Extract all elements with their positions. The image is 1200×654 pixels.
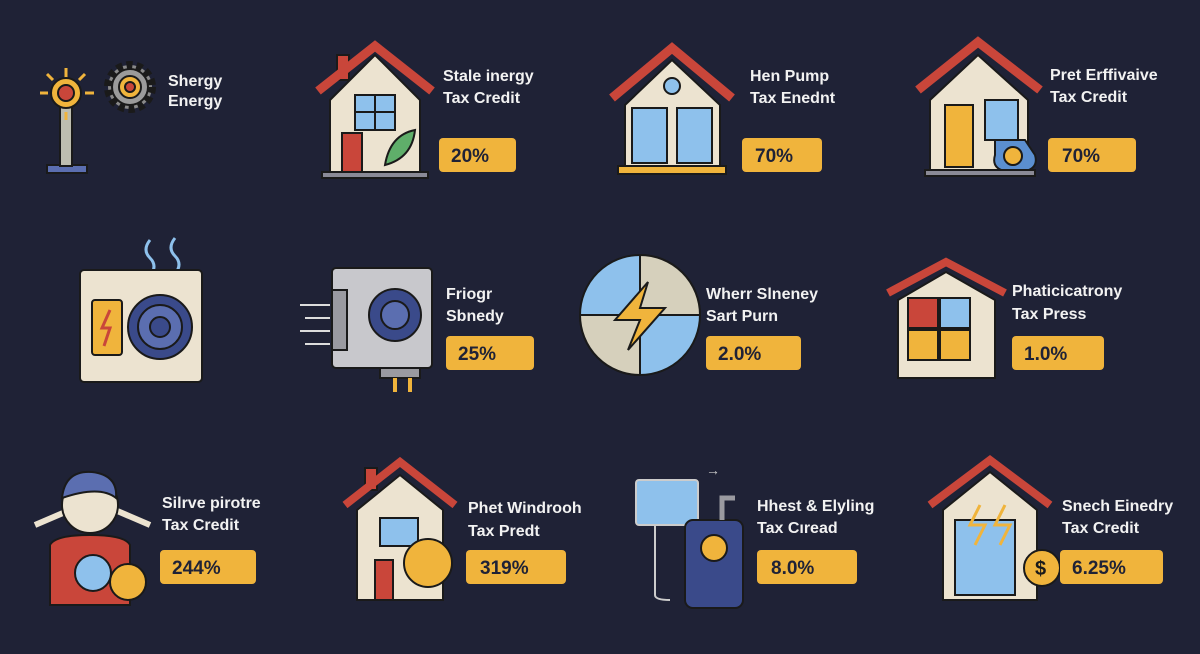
item: Wherr Slneney Sart Purn: Wherr Slneney	[706, 286, 818, 303]
item: Pret Erffivaive Tax Credit	[918, 42, 1158, 176]
item: Friogr Sbnedy	[300, 268, 534, 392]
item: battery unit	[80, 238, 202, 382]
item: Hhest & Elyling Tax Cıread: 8.0%	[771, 558, 814, 579]
item: Pret Erffivaive Tax Credit: Pret Erffivaive	[1050, 67, 1158, 84]
item: Phaticicatrony Tax Press: 1.0%	[1024, 344, 1067, 365]
icon: house with dollar coin	[930, 460, 1060, 600]
item: Friogr Sbnedy: 25%	[458, 344, 496, 365]
item: Silrve pirotre Tax Credit: Tax Credit	[162, 517, 240, 534]
icon: person with energy badges	[35, 472, 150, 605]
item: Hen Pump Tax Enednt	[612, 48, 836, 174]
item: Shergy Energy	[40, 65, 222, 173]
item: Shergy Energy: Energy	[168, 93, 222, 110]
icon: house with colored windows	[888, 262, 1005, 378]
item: Hhest & Elyling Tax Cıread: Hhest & Elyling	[757, 498, 874, 515]
item: Snech Einedry Tax Credit	[930, 460, 1173, 600]
item: Hen Pump Tax Enednt: Hen Pump	[750, 68, 829, 85]
item: Snech Einedry Tax Credit: Tax Credit	[1062, 520, 1140, 537]
item: Wherr Slneney Sart Purn: Sart Purn	[706, 308, 778, 325]
badge	[439, 138, 516, 172]
item: Wherr Slneney Sart Purn: 2.0%	[718, 344, 761, 365]
item: Pret Erffivaive Tax Credit: Tax Credit	[1050, 89, 1128, 106]
icon: house with windows	[612, 48, 732, 174]
item: Snech Einedry Tax Credit: Snech Einedry	[1062, 498, 1173, 515]
item: Stale inergy Tax Credit: Stale inergy	[443, 68, 534, 85]
item: Hen Pump Tax Enednt: Tax Enednt	[750, 90, 836, 107]
icon: boiler	[300, 268, 432, 392]
icon: sun on pole and gear	[40, 65, 152, 173]
item: Phaticicatrony Tax Press: Phaticicatrony	[1012, 283, 1122, 300]
icon: monitor and device: →	[706, 462, 720, 478]
item: Stale inergy Tax Credit: Tax Credit	[443, 90, 521, 107]
icon: monitor and device	[636, 462, 743, 608]
item: Phet Windrooh Tax Predt: Tax Predt	[468, 523, 540, 540]
icon: house with leaf	[318, 46, 432, 178]
label: Shergy	[168, 73, 222, 90]
icon: house with money bag	[918, 42, 1040, 176]
item: Snech Einedry Tax Credit: 6.25%	[1072, 558, 1126, 579]
item: Silrve pirotre Tax Credit: Silrve pirotre	[162, 495, 261, 512]
item: Phaticicatrony Tax Press: Tax Press	[1012, 306, 1087, 323]
item: Friogr Sbnedy: Sbnedy	[446, 308, 504, 325]
item: Hen Pump Tax Enednt: 70%	[755, 146, 793, 167]
item: Pret Erffivaive Tax Credit: 70%	[1062, 146, 1100, 167]
item: Hhest & Elyling Tax Cıread: Tax Cıread	[757, 520, 838, 537]
item: Silrve pirotre Tax Credit: 244%	[172, 558, 221, 579]
item: Stale inergy Tax Credit	[318, 46, 534, 178]
item: Wherr Slneney Sart Purn	[580, 255, 818, 375]
item: Silrve pirotre Tax Credit	[35, 472, 261, 605]
icon: circle with lightning	[580, 255, 700, 375]
item: Phaticicatrony Tax Press	[888, 262, 1122, 378]
badge: 20%	[451, 146, 489, 167]
item: Hhest & Elyling Tax Cıread	[636, 462, 874, 608]
icon: heat unit with battery and fan	[80, 238, 202, 382]
item: Phet Windrooh Tax Predt	[345, 462, 582, 600]
icon: house with dollar coin: $	[1035, 558, 1046, 580]
item: Phet Windrooh Tax Predt: Phet Windrooh	[468, 500, 582, 517]
item: Phet Windrooh Tax Predt: 319%	[480, 558, 529, 579]
icon: house with solar badge	[345, 462, 455, 600]
item: Friogr Sbnedy: Friogr	[446, 286, 492, 303]
